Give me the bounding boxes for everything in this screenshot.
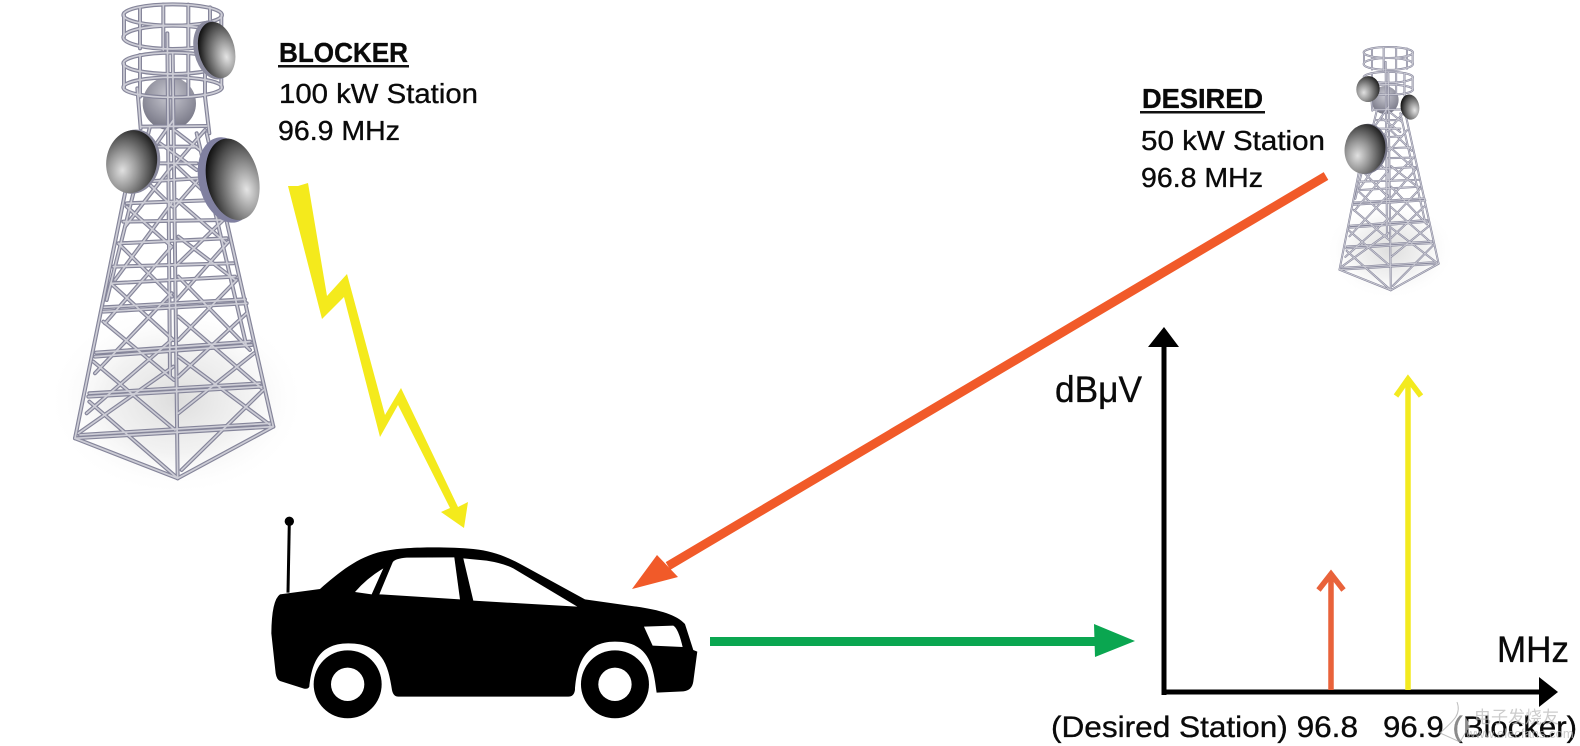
car antenna <box>285 517 294 593</box>
desired label: 50 kW Station <box>1141 125 1325 156</box>
icon: car <box>271 517 697 718</box>
car front wheel <box>581 650 649 718</box>
tower: blocker station <box>47 4 307 497</box>
blocker label: BLOCKER <box>279 37 408 68</box>
small tower ground shadow <box>1325 200 1455 300</box>
x axis arrow <box>1162 677 1558 707</box>
small tower sphere <box>1371 86 1399 114</box>
desired label <box>1140 83 1325 193</box>
x axis label: MHz <box>1497 629 1569 670</box>
arrow: desired signal <box>632 176 1326 589</box>
desired tick label: (Desired Station) 96.8 <box>1051 711 1358 744</box>
y axis arrow <box>1148 327 1179 695</box>
dish: small right <box>1399 93 1421 121</box>
watermark: 电子发烧友 <box>1474 708 1559 727</box>
lightning arrow: blocker signal <box>288 183 468 528</box>
blocker label: 100 kW Station <box>279 78 478 109</box>
dish: right <box>190 131 267 228</box>
dish: left <box>101 125 165 198</box>
spectrum chart <box>1051 327 1577 744</box>
car windows <box>355 557 683 647</box>
tower lattice <box>75 4 273 478</box>
tower ground shadow <box>47 303 307 497</box>
y axis label: dBμV <box>1055 369 1142 410</box>
blocker signal spike <box>1396 378 1421 690</box>
watermark <box>1440 702 1574 742</box>
blocker tick label: 96.9 (Blocker) <box>1383 711 1577 744</box>
dish: top right <box>187 16 241 84</box>
desired label: 96.8 MHz <box>1141 162 1263 193</box>
dish: small left <box>1354 74 1382 104</box>
tower: desired station <box>1325 47 1455 300</box>
tower sphere <box>143 77 196 130</box>
dish: large left <box>1341 120 1391 178</box>
arrow: car output to spectrum <box>710 624 1135 657</box>
blocker label <box>278 37 478 146</box>
small tower lattice <box>1339 47 1439 290</box>
watermark: www.elecfans.com <box>1465 726 1574 741</box>
desired signal spike <box>1318 573 1344 690</box>
blocker label: 96.9 MHz <box>278 115 400 146</box>
car rear wheel <box>314 650 382 718</box>
desired label: DESIRED <box>1142 83 1263 114</box>
car body <box>271 547 697 697</box>
